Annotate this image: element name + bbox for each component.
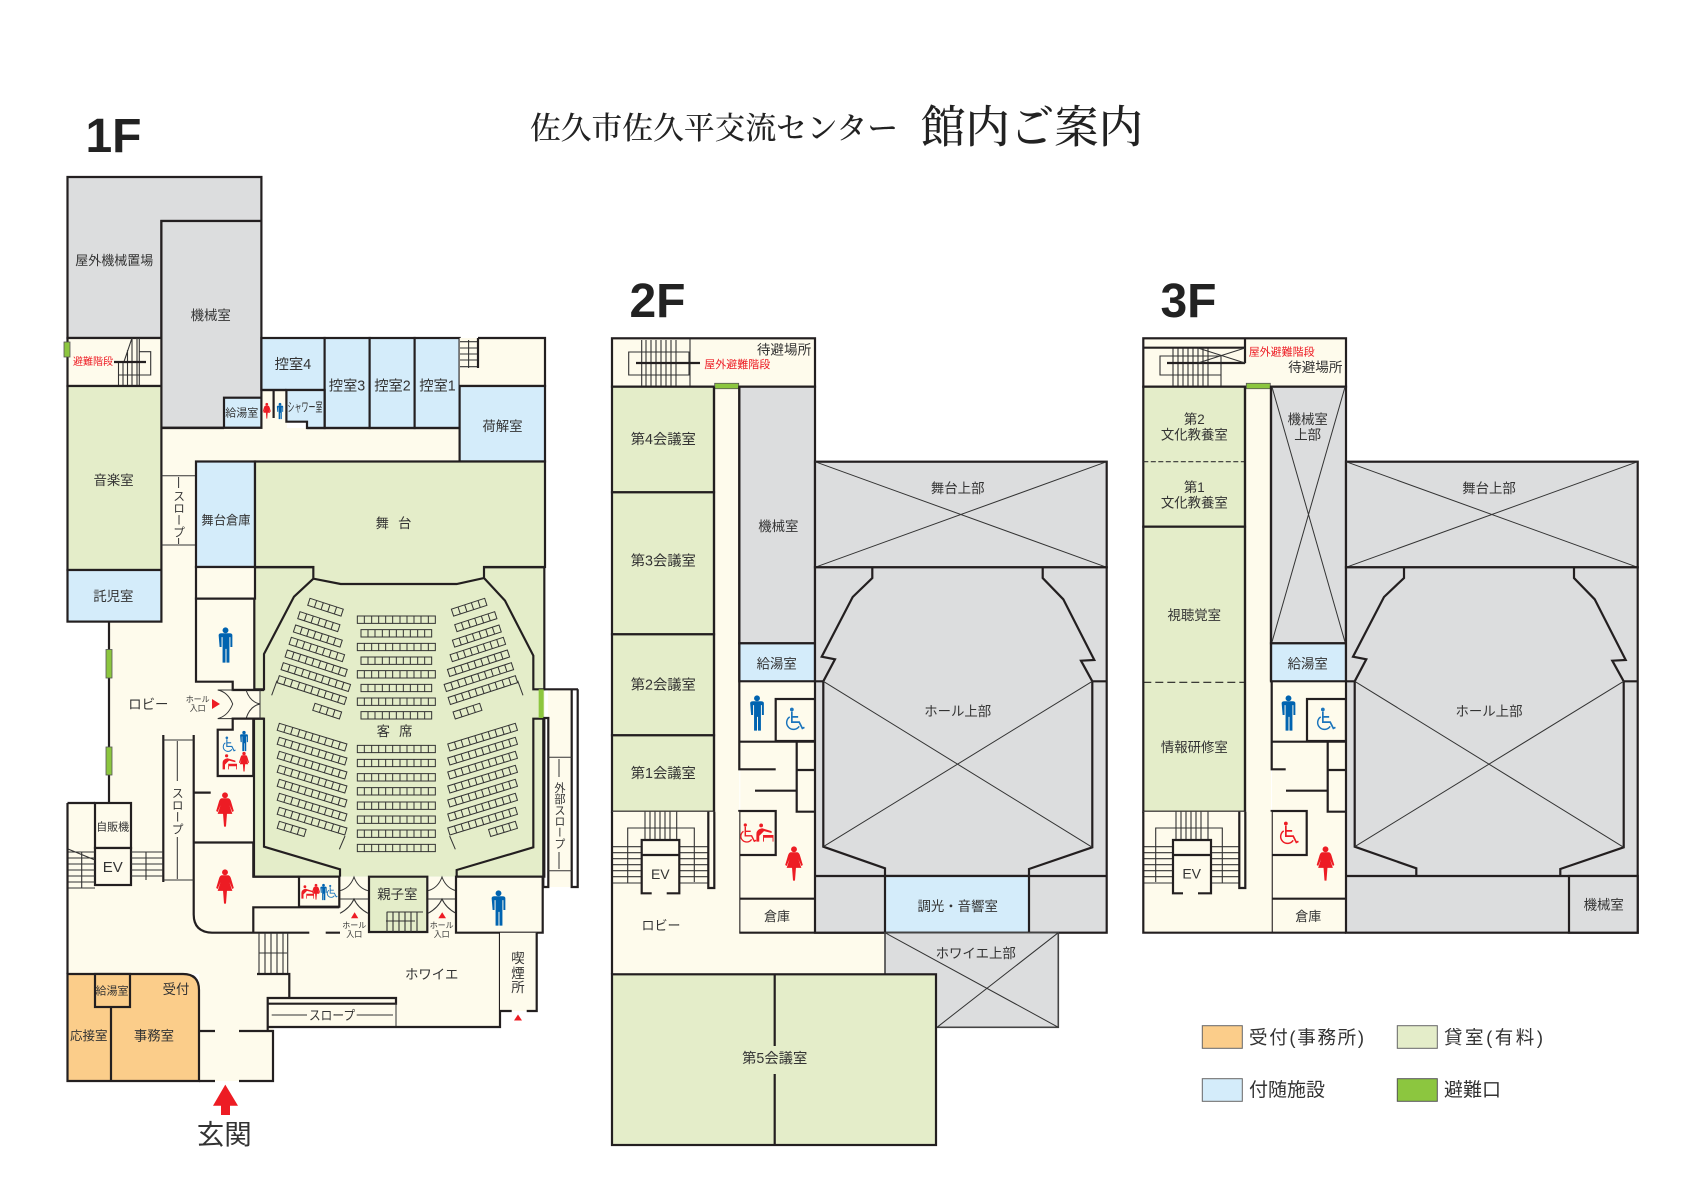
room: machine room (161, 221, 261, 428)
hall overhead: ホール上部 (924, 704, 991, 719)
waiting area with outdoor stairs (1143, 338, 1346, 387)
room: waiting room 1: 控室1 (419, 378, 456, 395)
corridor (1245, 386, 1271, 812)
lobby: EV (1182, 866, 1202, 882)
left seating (272, 598, 351, 849)
smoking room: 喫 (511, 951, 525, 966)
slope: foyer: スロープ (309, 1008, 355, 1023)
title: 館内ご案内 (921, 103, 1143, 153)
room: machine room southeast (1569, 876, 1638, 933)
toilets block (1272, 681, 1346, 933)
room: waiting room 4 (261, 338, 325, 390)
external slope: 外部スロープ (553, 782, 566, 849)
room: kitchenette (739, 643, 815, 681)
slope: north: スロープ (172, 490, 186, 538)
waiting area with outdoor stairs: 屋外避難階段 (704, 357, 770, 371)
legend: facilities: 付随施設 (1249, 1079, 1325, 1101)
office area (68, 974, 199, 1081)
hall overhead (815, 567, 1107, 933)
evacuation stairs: 避難階段 (73, 355, 113, 368)
south hall entrance left (340, 877, 368, 939)
room: meeting room 2 (612, 634, 714, 735)
room: lighting and sound (885, 876, 1029, 933)
title (530, 103, 1143, 153)
corridor wall (1245, 387, 1271, 812)
emergency exit (715, 383, 739, 389)
room: stage storage (196, 462, 255, 567)
lobby (612, 812, 885, 974)
room: machine room (739, 387, 815, 643)
hall overhead: ホール上部 (1456, 704, 1522, 719)
stage overhead (1346, 462, 1638, 567)
floor plan: 3F (1143, 338, 1638, 933)
south hall entrance right: 入口 (434, 930, 450, 939)
room: waiting room 2: 控室2 (374, 378, 411, 395)
room: stage (255, 462, 545, 567)
room: parent and child room (369, 877, 427, 932)
room: culture classrooms: 第1 (1184, 479, 1205, 495)
machine room overhead (1271, 387, 1346, 643)
waiting area with outdoor stairs: 待避場所 (1288, 360, 1343, 375)
title: 佐久市佐久平交流センター (530, 111, 898, 146)
room: childcare: 託児室 (93, 589, 133, 604)
room: childcare (68, 570, 161, 622)
corridor wall (714, 387, 739, 812)
south walls (253, 842, 340, 933)
women's toilet: upper (216, 792, 234, 827)
emergency exit (64, 342, 70, 357)
room: shower (286, 390, 325, 428)
room: lighting and sound: 調光・音響室 (918, 899, 998, 914)
stage overhead (815, 462, 1107, 567)
room: meeting room 2: 第2会議室 (631, 675, 696, 693)
toilets block (739, 681, 815, 933)
women's toilet: lower (216, 869, 234, 904)
corridor (714, 386, 739, 812)
foyer label: ホワイエ (405, 967, 458, 982)
arrow: entrance (213, 1085, 238, 1115)
room: machine room: 機械室 (191, 308, 231, 323)
room: accessible toilets (218, 719, 253, 776)
corridor wall (161, 427, 460, 429)
toilets block: 倉庫 (1295, 909, 1321, 924)
room: culture classrooms: 文化教養室 (1161, 426, 1228, 442)
room: machine room southeast: 機械室 (1584, 897, 1624, 912)
emergency exits: lobby (106, 622, 112, 803)
room: waiting room 1 (415, 338, 460, 428)
vending and elevator: EV (103, 859, 123, 876)
room: men's toilet (196, 599, 254, 690)
stairs: foyer (257, 933, 289, 998)
room: auditorium (254, 565, 544, 877)
room: men's toilet south (456, 877, 543, 933)
room: meeting room 4 (612, 387, 714, 492)
room: upper right cream with stairs (460, 338, 545, 386)
lobby: EV (651, 866, 670, 882)
evacuation stairs (68, 338, 161, 386)
legend (1202, 1026, 1543, 1101)
lobby and corridor floor (67, 390, 500, 1081)
room: stage storage: 舞台倉庫 (201, 513, 251, 528)
smoking room: 所 (511, 980, 525, 995)
slope: foyer (268, 998, 396, 1031)
floor plan: 1F (64, 177, 578, 1150)
legend: facilities (1202, 1079, 1325, 1101)
room: kitchenette (1271, 643, 1346, 681)
room: unpacking room (460, 386, 545, 462)
right seating (444, 598, 523, 849)
room: music room: 音楽室 (94, 473, 134, 488)
room: machine room: 機械室 (758, 519, 798, 534)
cream corridor block beneath stage storage (196, 567, 255, 599)
room: meeting room 1: 第1会議室 (631, 764, 696, 782)
multipurpose toilet south (299, 877, 339, 907)
center seating (357, 616, 435, 852)
legend: reception (1202, 1026, 1364, 1048)
emergency exit (1246, 383, 1270, 389)
room: waiting room 3 (325, 338, 370, 428)
room: meeting room 1 (612, 735, 714, 812)
waiting area with outdoor stairs: 屋外避難階段 (1249, 345, 1315, 359)
room: meeting room 5: 第5会議室 (742, 1049, 807, 1067)
legend: reception: 受付(事務所) (1249, 1027, 1364, 1048)
stairs: right of elevator (131, 852, 163, 880)
floor plan: 2F (612, 338, 1107, 1145)
room: culture classrooms (1143, 387, 1245, 527)
south hall entrance left: 入口 (346, 930, 362, 939)
external slope (543, 689, 578, 887)
office area: 給湯室 (96, 985, 128, 998)
room: music room (68, 386, 161, 570)
room: waiting room 2 (370, 338, 415, 428)
corridor toilets (261, 390, 286, 419)
lobby: ロビー (641, 918, 681, 933)
west hall doors: ホール (186, 695, 210, 704)
stairs: left of elevator (68, 803, 95, 888)
south hall entrance left: ホール (342, 921, 366, 930)
room: kitchenette (224, 398, 261, 428)
foyer overhead: ホワイエ上部 (936, 946, 1016, 961)
door: exit green (539, 689, 544, 718)
room: meeting room 3 (612, 492, 714, 634)
room: kitchenette: 給湯室 (1288, 656, 1328, 671)
machine room overhead: 上部 (1294, 427, 1321, 442)
slope: lobby: スロープ (170, 787, 184, 835)
west hall doors: 入口 (190, 704, 206, 713)
floor label: 3F: 3F (1160, 275, 1217, 328)
room: meeting room 3: 第3会議室 (631, 552, 696, 570)
room: kitchenette: 給湯室 (757, 656, 797, 671)
foyer outer wall (268, 933, 500, 1027)
foyer overhead (885, 933, 1058, 1027)
vending and elevator: 自販機 (96, 820, 129, 833)
room: audiovisual and IT (1143, 527, 1245, 812)
floor label: 2F: 2F (629, 275, 686, 328)
smoking room (500, 933, 537, 1020)
room: waiting room 3: 控室3 (329, 378, 365, 395)
south hall entrance right: ホール (430, 921, 454, 930)
waiting area with outdoor stairs: 待避場所 (757, 342, 812, 357)
hall overhead (1346, 567, 1638, 933)
west outer wall (66, 803, 69, 974)
stage overhead: 舞台上部 (1462, 481, 1516, 496)
west hall doors (186, 690, 264, 719)
legend: rental rooms (1397, 1026, 1543, 1048)
legend: rental rooms: 貸室(有料) (1444, 1027, 1543, 1048)
smoking room: 煙 (511, 966, 525, 981)
room: waiting room 4: 控室4 (275, 356, 311, 373)
room: meeting room 5 (612, 974, 936, 1145)
room: outdoor machinery yard: 屋外機械置場 (75, 253, 153, 268)
slope: lobby (163, 735, 309, 933)
room: audiovisual and IT: 視聴覚室 (1168, 608, 1221, 623)
vending and elevator (95, 803, 131, 885)
room: audiovisual and IT: 情報研修室 (1161, 740, 1228, 755)
room: culture classrooms: 文化教養室 (1161, 494, 1228, 510)
legend: emergency exit (1397, 1079, 1501, 1101)
machine room overhead: 機械室 (1288, 412, 1328, 427)
room: shower: シャワー室 (288, 400, 322, 414)
floor label: 1F: 1F (85, 110, 142, 163)
room: meeting room 4: 第4会議室 (631, 430, 696, 448)
waiting area with outdoor stairs (612, 338, 815, 387)
toilets block: 倉庫 (764, 909, 790, 924)
slope: north (161, 476, 196, 545)
room: outdoor machinery yard (68, 177, 261, 338)
stage overhead: 舞台上部 (931, 481, 984, 496)
room: culture classrooms: 第2 (1184, 411, 1205, 427)
lobby (1143, 812, 1346, 933)
room: stage: 舞台 (376, 516, 420, 531)
office area: 事務室 (134, 1029, 174, 1044)
lobby label: ロビー (128, 697, 168, 712)
entrance vestibule (199, 1031, 273, 1081)
office area: 受付 (163, 982, 189, 997)
entrance label: 玄関 (197, 1119, 252, 1150)
room: kitchenette: 給湯室 (225, 407, 258, 420)
room: unpacking room: 荷解室 (482, 419, 523, 434)
office area: 応接室 (70, 1028, 107, 1043)
south hall entrance right (428, 877, 456, 939)
auditorium label: 客席 (377, 724, 421, 739)
room: parent and child room: 親子室 (377, 887, 417, 902)
legend: emergency exit: 避難口 (1444, 1079, 1501, 1101)
